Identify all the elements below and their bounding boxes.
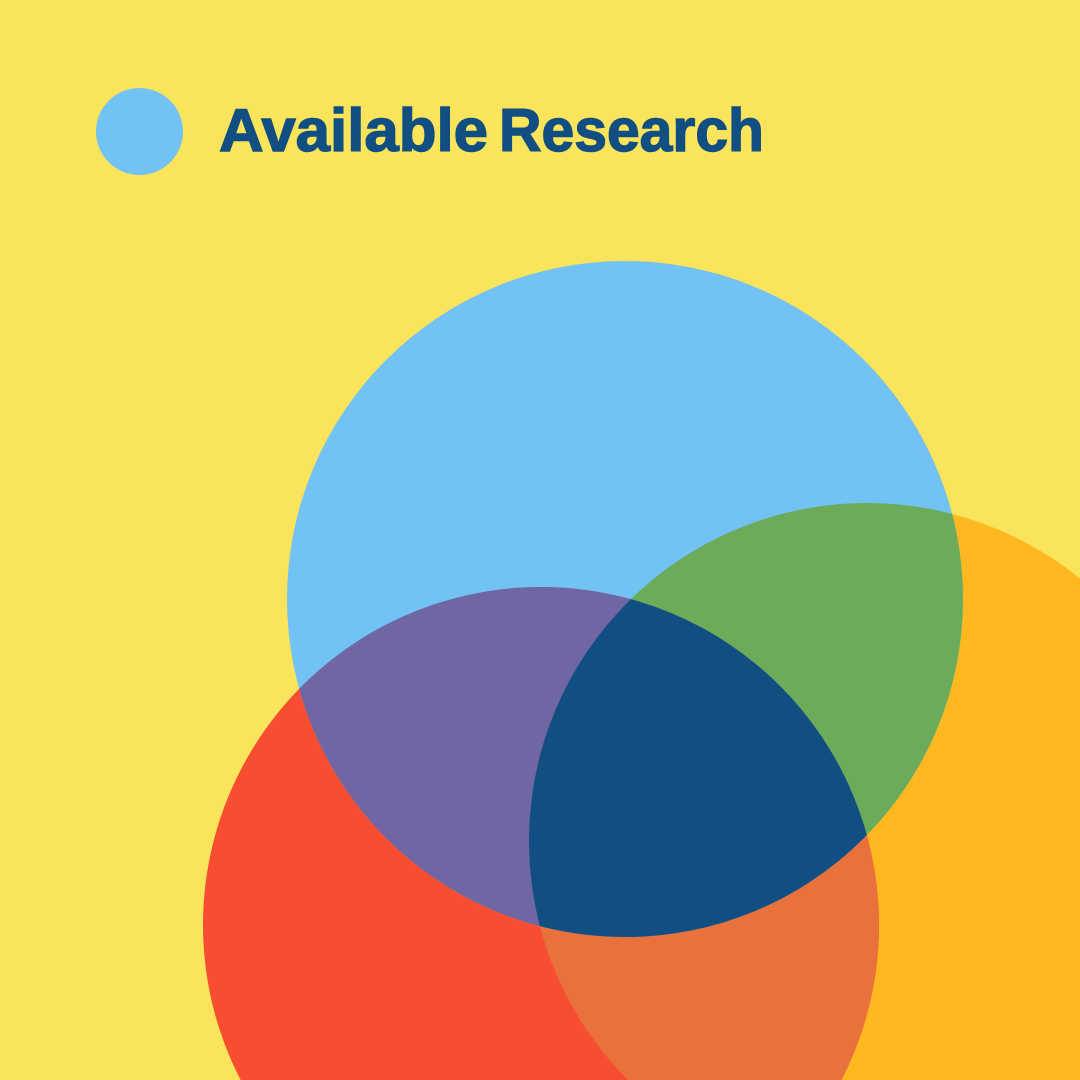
overlap: red and orange [540,836,879,1080]
venn diagram [203,261,1080,1080]
title: Research [499,97,764,164]
title: Available [219,97,488,164]
overlap: all three circles [529,599,867,937]
title [219,97,764,164]
circle: red [203,587,879,1080]
circle: orange [529,503,1080,1080]
overlap: blue and orange [540,503,963,937]
circle: blue [287,261,963,937]
icon: legend circle [96,88,183,175]
overlap: blue and red [299,587,867,937]
